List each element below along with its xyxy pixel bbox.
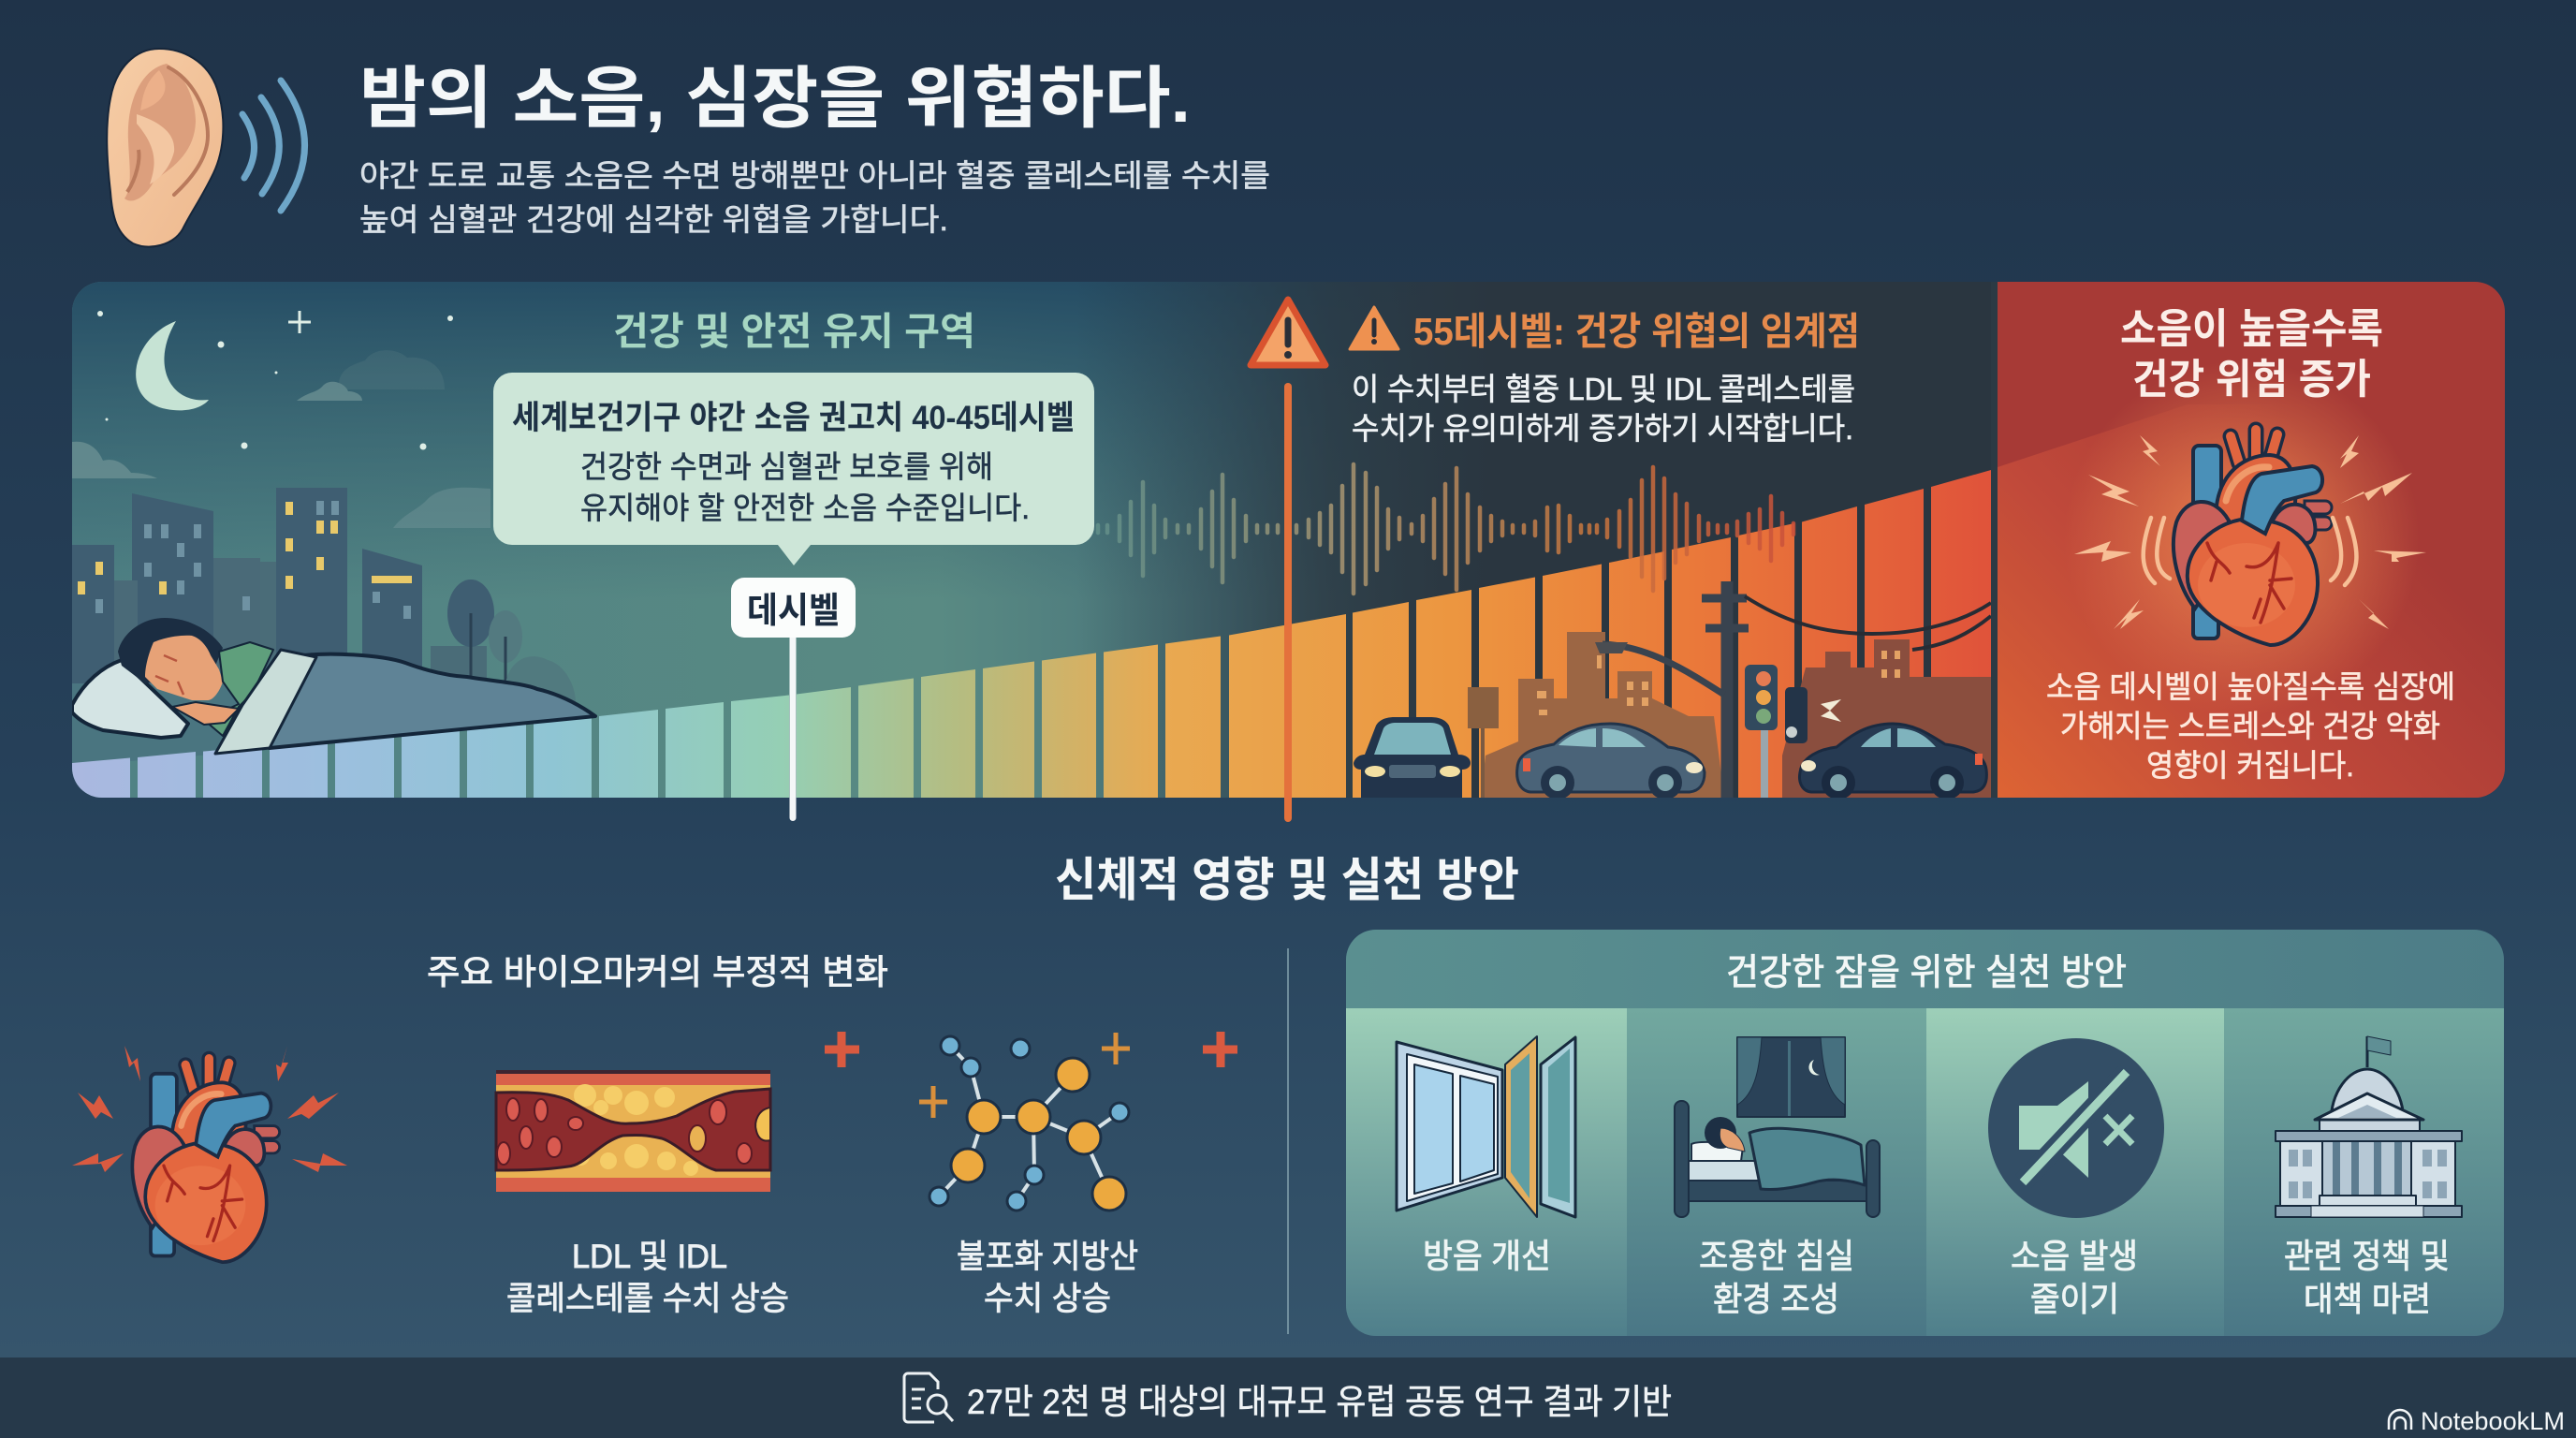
icon: ear with sound waves — [107, 49, 304, 247]
labels: 관련 정책 및 — [2284, 1237, 2450, 1275]
callout: WHO recommendation: 유지해야 할 안전한 소음 수준입니다. — [580, 491, 1030, 525]
description: 이 수치부터 혈중 LDL 및 IDL 콜레스테롤 — [1352, 372, 1855, 406]
marker: decibel label and line — [731, 578, 856, 821]
footer bar — [0, 1357, 2576, 1438]
panel: health risk — [1998, 282, 2509, 798]
label: unsaturated fatty acids: 불포화 지방산 — [957, 1239, 1138, 1275]
car: side view — [1517, 724, 1705, 800]
subtitle: 높여 심혈관 건강에 심각한 위협을 가합니다. — [359, 202, 948, 237]
risk panel description — [2046, 669, 2455, 783]
labels: 줄이기 — [2030, 1280, 2119, 1318]
car: front view — [1354, 717, 1471, 798]
panel: biomarkers — [72, 953, 1237, 1317]
callout: WHO recommendation: 건강한 수면과 심혈관 보호를 위해 — [580, 449, 993, 484]
trees — [447, 580, 576, 702]
labels: 방음 개선 — [1423, 1237, 1551, 1275]
source note: 27만 2천 명 대상의 대규모 유럽 공동 연구 결과 기반 — [967, 1383, 1672, 1421]
icon: narrowed artery — [496, 1070, 770, 1192]
label: LDL and IDL — [506, 1239, 789, 1317]
icon: moon and stars — [97, 311, 453, 449]
panel: healthy sleep actions — [1346, 930, 2504, 1336]
icon: molecule — [919, 1033, 1130, 1211]
car: side view dark — [1799, 724, 1986, 800]
risk panel description: 소음 데시벨이 높아질수록 심장에 — [2046, 669, 2455, 704]
labels — [1423, 1237, 2450, 1318]
city skyline at night — [72, 488, 487, 693]
header: ear icon and title block — [107, 49, 1270, 247]
sleeping person — [72, 618, 595, 754]
sky background — [72, 282, 2000, 798]
subtitle: 야간 도로 교통 소음은 수면 방해뿐만 아니라 혈중 콜레스테롤 수치를 — [359, 158, 1270, 193]
risk panel description: 가해지는 스트레스와 건강 악화 — [2060, 709, 2440, 743]
heading: 건강한 잠을 위한 실천 방안 — [1726, 953, 2127, 993]
icon: window — [1397, 1036, 1575, 1217]
marker: 55 decibel threshold line with warning sign — [1251, 300, 1325, 822]
labels: 대책 마련 — [2304, 1280, 2431, 1318]
icon: muted speaker — [1988, 1038, 2164, 1218]
dark divider before red panel — [1991, 282, 1998, 798]
callout: WHO recommendation — [493, 373, 1094, 565]
risk panel heading: 소음이 높을수록 — [2120, 306, 2383, 352]
panel: noise level band — [72, 282, 2509, 800]
label: LDL and IDL: 콜레스테롤 수치 상승 — [506, 1281, 789, 1317]
marker: decibel label and line: 데시벨 — [747, 592, 840, 631]
noise barrier panels — [72, 470, 1991, 798]
street scene — [1468, 581, 1991, 798]
icon: stressed heart — [2074, 430, 2426, 645]
risk panel heading: 건강 위험 증가 — [2132, 357, 2371, 403]
icon: government building — [2276, 1036, 2462, 1217]
threshold text block — [1350, 307, 1860, 446]
icon: red plus — [825, 1032, 859, 1067]
clouds — [72, 350, 490, 528]
label: unsaturated fatty acids — [957, 1239, 1138, 1317]
label: LDL and IDL: LDL 및 IDL — [572, 1239, 727, 1275]
label: unsaturated fatty acids: 수치 상승 — [984, 1281, 1111, 1317]
description — [1352, 372, 1855, 446]
labels: 조용한 침실 — [1699, 1237, 1854, 1275]
title: 밤의 소음, 심장을 위협하다. — [359, 62, 1191, 137]
risk panel heading — [2120, 306, 2383, 403]
biomarker heading: 주요 바이오마커의 부정적 변화 — [427, 953, 888, 991]
icon: document with magnifier — [904, 1373, 953, 1422]
sound wave — [1098, 464, 1793, 594]
icon: red plus — [1203, 1032, 1237, 1067]
NotebookLM mark: NotebookLM — [2421, 1407, 2565, 1435]
labels: 환경 조성 — [1713, 1280, 1839, 1318]
icon: heart with lightning — [72, 1046, 347, 1262]
subtitle — [359, 158, 1270, 237]
section heading: 신체적 영향 및 실천 방안 — [1055, 854, 1519, 906]
risk panel description: 영향이 커집니다. — [2146, 748, 2354, 783]
description: 수치가 유의미하게 증가하기 시작합니다. — [1352, 411, 1853, 446]
labels: 소음 발생 — [2011, 1237, 2138, 1275]
safe zone heading: 건강 및 안전 유지 구역 — [613, 310, 975, 353]
icon: small warning — [1350, 307, 1398, 349]
icon: bed — [1675, 1037, 1880, 1217]
bed base — [72, 683, 266, 763]
panel background — [1346, 930, 2504, 1336]
heading: 55데시벨: 건강 위협의 임계점 — [1413, 310, 1860, 353]
callout: WHO recommendation: 세계보건기구 야간 소음 권고치 40-45데시벨 — [512, 400, 1075, 436]
